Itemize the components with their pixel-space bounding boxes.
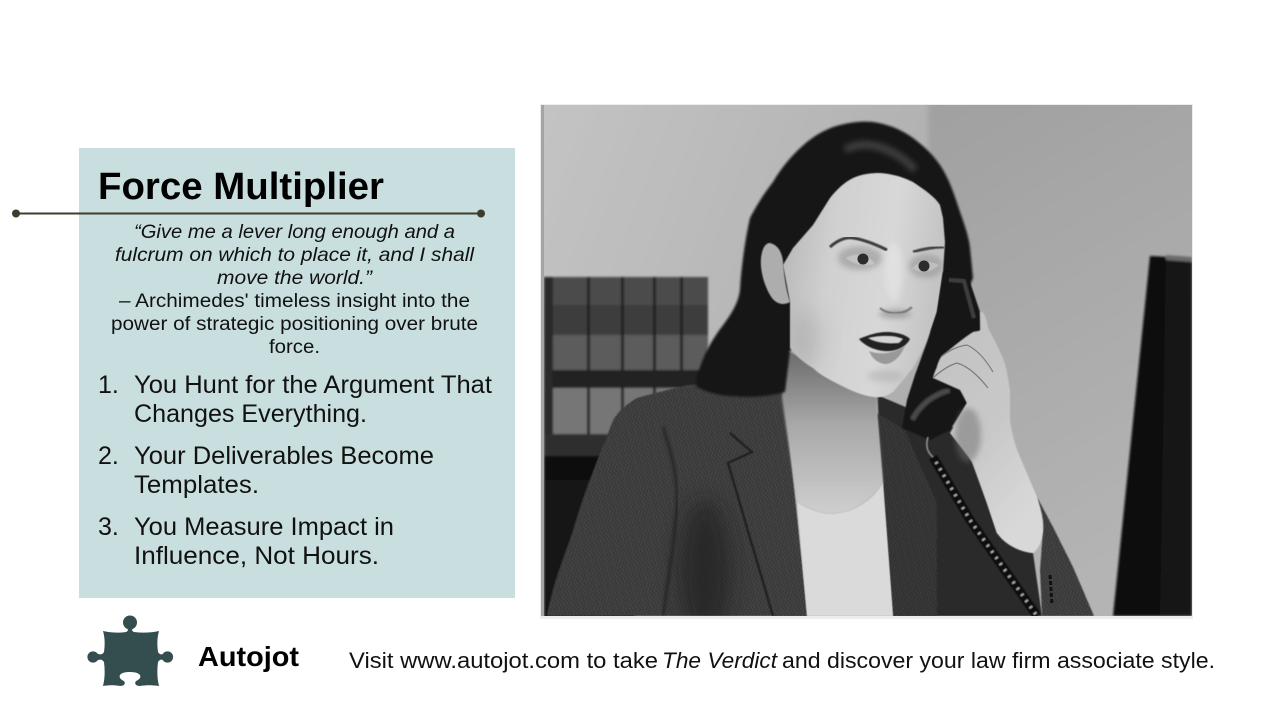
numbered list: Your Deliverables Become	[134, 442, 434, 470]
ear	[761, 243, 790, 304]
hair	[696, 122, 973, 397]
footer call to action: The Verdict	[662, 648, 778, 673]
numbered list: You Measure Impact in	[134, 513, 394, 541]
heading divider line with end dots	[12, 210, 485, 218]
attribution text	[111, 291, 478, 358]
left lapel	[773, 514, 808, 616]
footer call to action: Visit www.autojot.com to take	[349, 648, 658, 673]
attribution text: power of strategic positioning over brute	[111, 314, 478, 335]
panel: force multiplier text	[79, 148, 515, 598]
attribution text: – Archimedes' timeless insight into the	[119, 291, 470, 312]
numbered list: Influence, Not Hours.	[134, 542, 379, 570]
right lapel	[877, 413, 937, 616]
numbered list: 3.	[98, 513, 119, 541]
telephone handset	[902, 272, 980, 440]
archimedes quote: “Give me a lever long enough and a	[134, 222, 455, 243]
coiled phone cord	[927, 437, 1037, 616]
white top	[797, 483, 893, 616]
jacket shading	[663, 427, 731, 640]
attribution text: force.	[269, 337, 320, 358]
archimedes quote: move the world.”	[217, 268, 374, 289]
numbered list	[98, 371, 492, 570]
neck	[782, 350, 883, 514]
law books on shelf	[544, 277, 708, 620]
icon: puzzle piece	[87, 616, 173, 686]
jacket cuff	[1037, 497, 1094, 616]
numbered list: 1.	[98, 371, 119, 399]
footer call to action	[349, 648, 1215, 673]
numbered list: You Hunt for the Argument That	[134, 371, 492, 399]
footer call to action: and discover your law firm associate style.	[782, 648, 1215, 673]
jacket	[547, 384, 1094, 616]
numbered list: Templates.	[134, 471, 259, 499]
brand name: Autojot	[198, 641, 299, 672]
right jacket body	[877, 395, 1042, 616]
heading: Force Multiplier	[98, 166, 384, 208]
wall background	[530, 95, 1203, 625]
computer monitor	[1113, 255, 1192, 616]
numbered list: Changes Everything.	[134, 400, 367, 428]
eyes, brows, nose and mouth	[789, 238, 944, 382]
hand and forearm	[933, 312, 1043, 553]
numbered list: 2.	[98, 442, 119, 470]
archimedes quote	[115, 222, 475, 289]
archimedes quote: fulcrum on which to place it, and I shall	[115, 245, 475, 266]
face	[783, 173, 945, 397]
hair sheen	[845, 145, 915, 170]
photo: attorney on the telephone	[530, 95, 1203, 640]
